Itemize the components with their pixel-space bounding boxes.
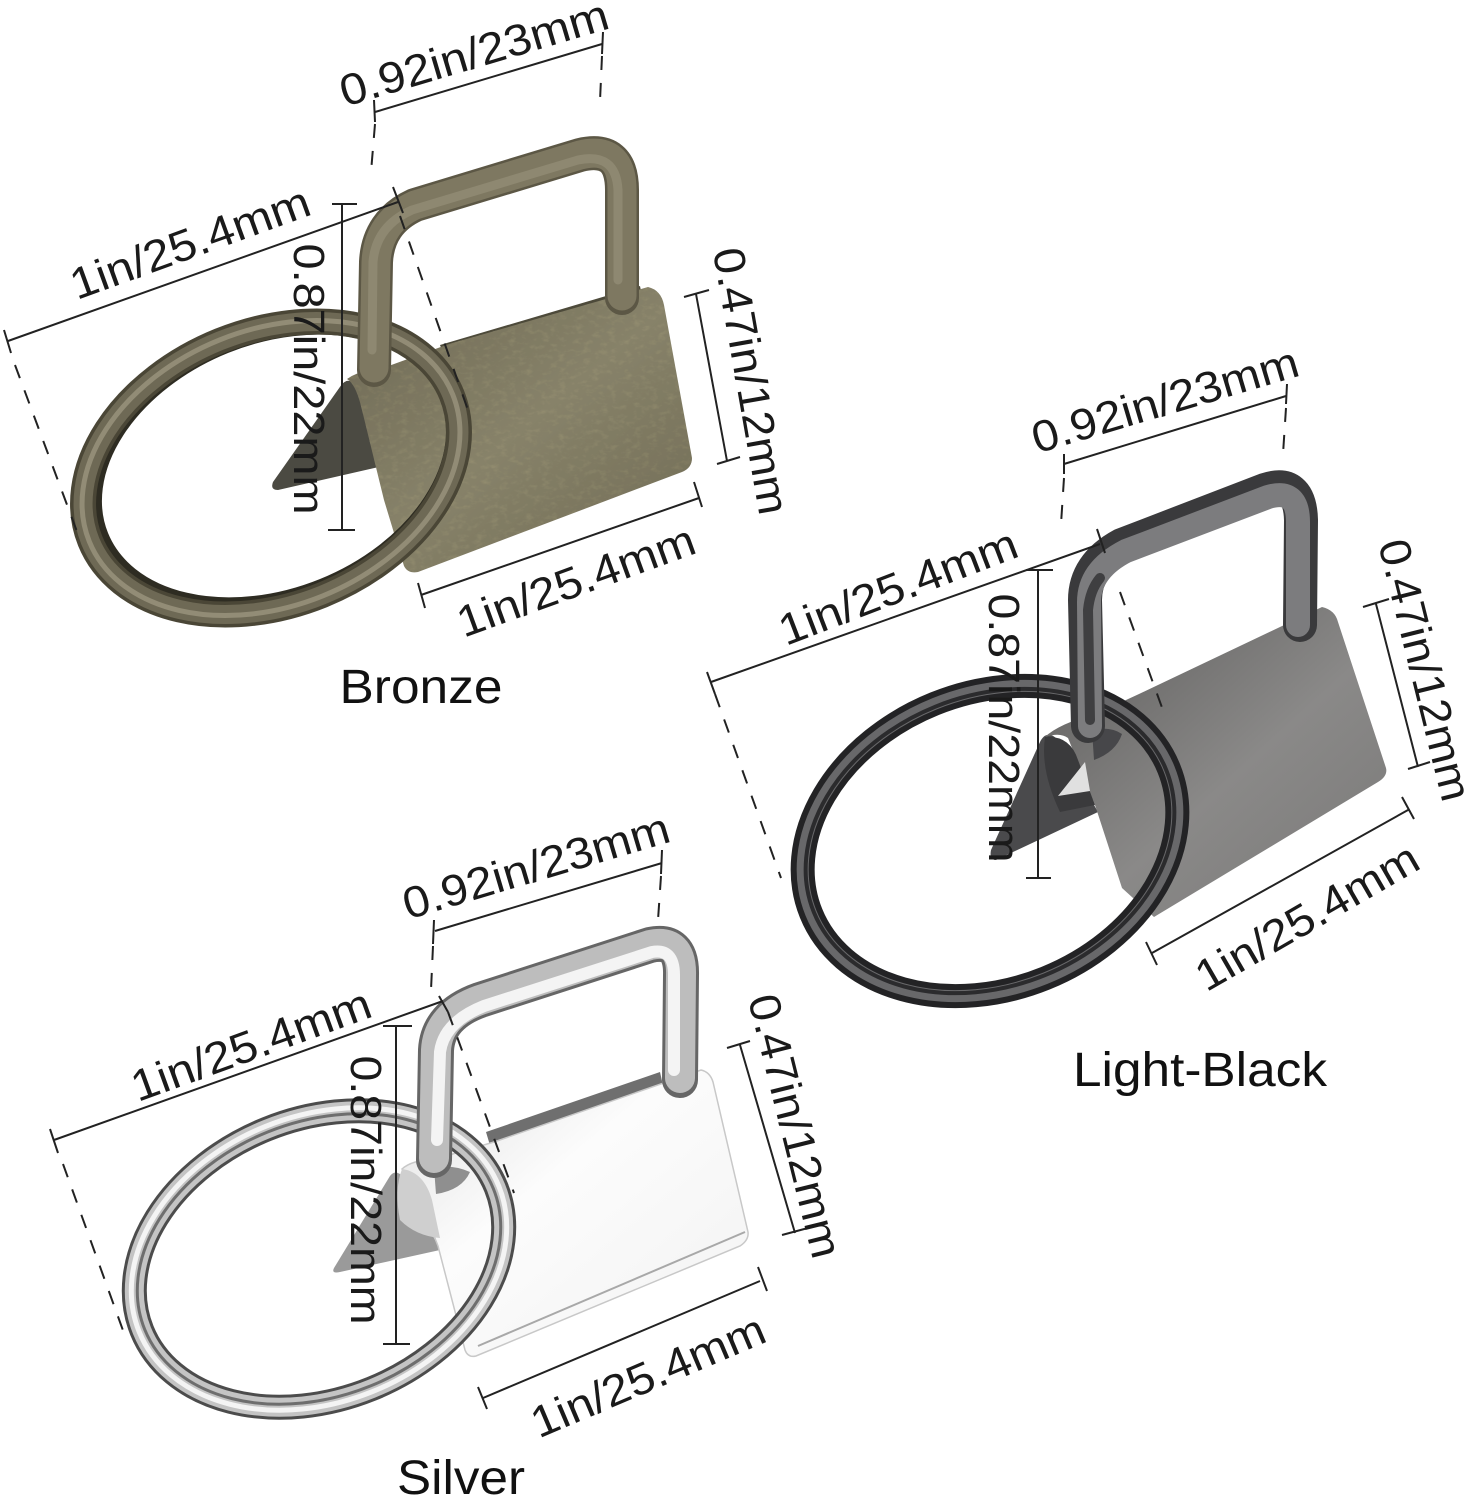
bronze back plate bbox=[440, 286, 642, 358]
dimension: clamp width bronze bbox=[418, 482, 702, 647]
dimension: body length light-black: 1in/25.4mm bbox=[772, 519, 1025, 655]
product: bronze key fob hardware bbox=[38, 153, 692, 669]
dimension: clamp width bronze: 1in/25.4mm bbox=[450, 516, 702, 647]
light-black clamp inner fold bbox=[1044, 737, 1095, 812]
dimension: clamp width light-black: 1in/25.4mm bbox=[1187, 834, 1428, 1001]
dimension: height bronze bbox=[284, 204, 357, 530]
dimension: loop width bronze: 0.92in/23mm bbox=[334, 0, 614, 116]
light-black split ring bbox=[756, 631, 1224, 1051]
dimension: loop width silver bbox=[397, 804, 675, 990]
product: silver key fob hardware bbox=[86, 944, 748, 1464]
bronze tab bbox=[272, 381, 392, 490]
dimension: loop width light-black: 0.92in/23mm bbox=[1026, 338, 1304, 463]
dimension: clamp width light-black bbox=[1146, 797, 1428, 1001]
dimension: clamp width silver: 1in/25.4mm bbox=[524, 1305, 773, 1448]
dimensions: light-black bbox=[707, 338, 1474, 1001]
light-black tab bbox=[991, 735, 1098, 860]
dimension: height light-black: 0.87in/22mm bbox=[979, 594, 1028, 862]
dimension: loop width bronze bbox=[334, 0, 614, 172]
dimension: loop width silver: 0.92in/23mm bbox=[397, 804, 675, 929]
silver clamp edge shading bbox=[478, 1232, 745, 1346]
product: light-black key fob hardware bbox=[756, 487, 1386, 1051]
dimension: clamp height bronze: 0.47in/12mm bbox=[703, 244, 798, 518]
light-black clamp highlight bbox=[1058, 762, 1090, 796]
dimension: height silver bbox=[341, 1026, 412, 1344]
dimension: body length light-black bbox=[707, 519, 1164, 878]
label: light-black: Light-Black bbox=[1073, 1044, 1328, 1097]
silver inner fold bbox=[397, 1169, 440, 1238]
dimension: loop width light-black bbox=[1026, 338, 1304, 524]
silver back plate bbox=[486, 1072, 664, 1152]
dimension: height light-black bbox=[979, 570, 1053, 878]
silver clamp bbox=[402, 1070, 748, 1356]
dimension: height bronze: 0.87in/22mm bbox=[284, 244, 333, 514]
dimension: body length silver bbox=[50, 979, 514, 1336]
bronze clamp bbox=[347, 287, 692, 572]
dimensions: bronze bbox=[4, 0, 798, 647]
light-black loop bbox=[1085, 487, 1301, 726]
light-black loop base shadow bbox=[1092, 729, 1122, 760]
dimensions: silver bbox=[50, 804, 851, 1448]
bronze loop bbox=[372, 153, 622, 370]
dimension: body length silver: 1in/25.4mm bbox=[124, 979, 378, 1112]
dimension: clamp width silver bbox=[478, 1267, 773, 1448]
silver split ring bbox=[86, 1054, 552, 1464]
silver loop bbox=[434, 944, 681, 1160]
dimension: height silver: 0.87in/22mm bbox=[341, 1056, 390, 1324]
silver loop base shadow bbox=[434, 1167, 470, 1194]
bronze split ring bbox=[38, 267, 504, 669]
dimension: body length bronze bbox=[4, 177, 469, 537]
silver tab bbox=[333, 1172, 440, 1272]
light-black clamp bbox=[1045, 607, 1386, 917]
dimension: body length bronze: 1in/25.4mm bbox=[63, 177, 317, 310]
dimension: clamp height silver: 0.47in/12mm bbox=[738, 989, 851, 1263]
label: bronze: Bronze bbox=[340, 661, 502, 714]
